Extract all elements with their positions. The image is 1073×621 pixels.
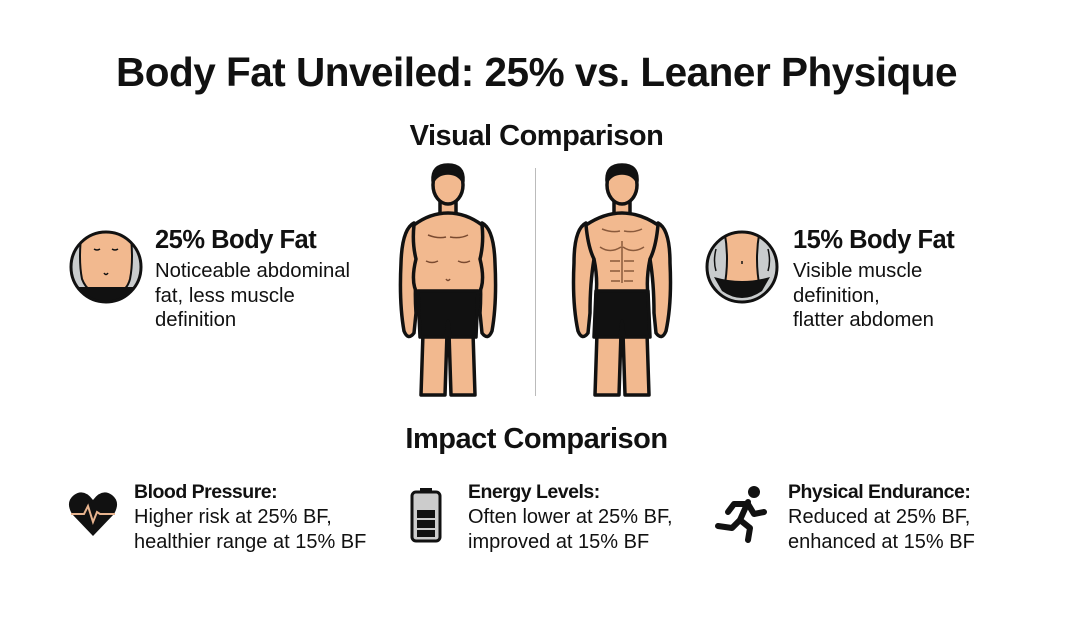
- heading: impact comparison: Impact Comparison: [405, 423, 668, 455]
- figure: 15% body: [572, 163, 672, 397]
- item: blood pressure: Higher risk at 25% BF,: [134, 506, 332, 528]
- icon: heart: [68, 492, 118, 536]
- title: Body Fat Unveiled: 25% vs. Leaner Physique: [116, 49, 957, 95]
- item: blood pressure: Blood Pressure:: [134, 481, 277, 503]
- item: blood pressure: healthier range at 15% BF: [134, 530, 366, 552]
- icon: runner: [715, 486, 767, 543]
- text: 15% body fat: flatter abdomen: [793, 309, 934, 331]
- item: physical endurance: Physical Endurance:: [788, 481, 970, 503]
- item: physical endurance: enhanced at 15% BF: [788, 530, 975, 552]
- figure: 25% body: [398, 163, 498, 397]
- text: 15% body fat: Visible muscle: [793, 260, 922, 282]
- item: energy levels: Often lower at 25% BF,: [468, 506, 673, 528]
- text: 25% body fat: 25% Body Fat: [155, 226, 316, 254]
- heading: visual comparison: Visual Comparison: [410, 120, 663, 152]
- item: blood pressure: [134, 481, 366, 552]
- text: 25% body fat: Noticeable abdominal: [155, 260, 350, 282]
- text: 15% body fat: definition,: [793, 284, 880, 306]
- item: physical endurance: Reduced at 25% BF,: [788, 506, 970, 528]
- text: 25% body fat: [155, 226, 350, 331]
- divider: [535, 168, 536, 396]
- text: 25% body fat: fat, less muscle: [155, 284, 295, 306]
- item: energy levels: improved at 15% BF: [468, 530, 649, 552]
- text: 25% body fat: definition: [155, 309, 236, 331]
- icon: belly 25%: [70, 230, 142, 304]
- icon: battery: [410, 488, 442, 542]
- icon: waist 15%: [706, 230, 778, 304]
- item: physical endurance: [788, 481, 975, 552]
- item: energy levels: Energy Levels:: [468, 481, 600, 503]
- item: energy levels: [468, 481, 673, 552]
- text: 15% body fat: [793, 226, 954, 331]
- text: 15% body fat: 15% Body Fat: [793, 226, 954, 254]
